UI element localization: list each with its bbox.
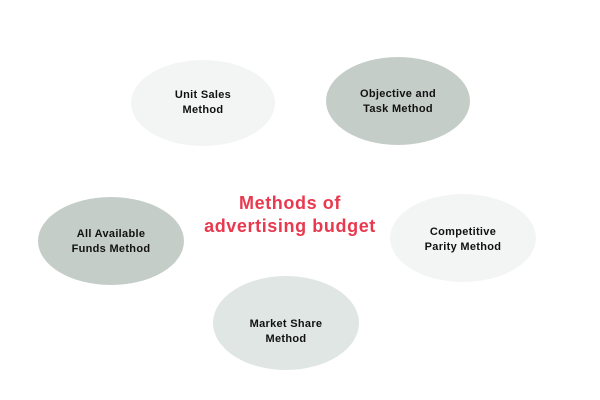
ellipse: All Available Funds Method [38,197,184,285]
ellipse: Market Share Method: Method [266,333,306,345]
ellipse: Unit Sales Method: Unit Sales [175,89,231,101]
title: advertising budget [204,216,376,236]
ellipse: Objective and Task Method [326,57,470,145]
ellipse: Competitive Parity Method: Parity Method [425,241,501,253]
ellipse: All Available Funds Method: All Available [77,228,145,240]
ellipse: All Available Funds Method: Funds Method [72,243,150,255]
ellipse: Unit Sales Method [131,60,275,146]
title [204,193,376,236]
ellipse: Competitive Parity Method [390,194,536,282]
ellipse: Objective and Task Method: Task Method [363,103,433,115]
ellipse: Competitive Parity Method: Competitive [430,226,496,238]
ellipse: Unit Sales Method: Method [183,104,223,116]
ellipse: Market Share Method [213,276,359,370]
title: Methods of [239,193,341,213]
ellipse: Market Share Method: Market Share [250,318,322,330]
ellipse: Objective and Task Method: Objective and [360,88,436,100]
